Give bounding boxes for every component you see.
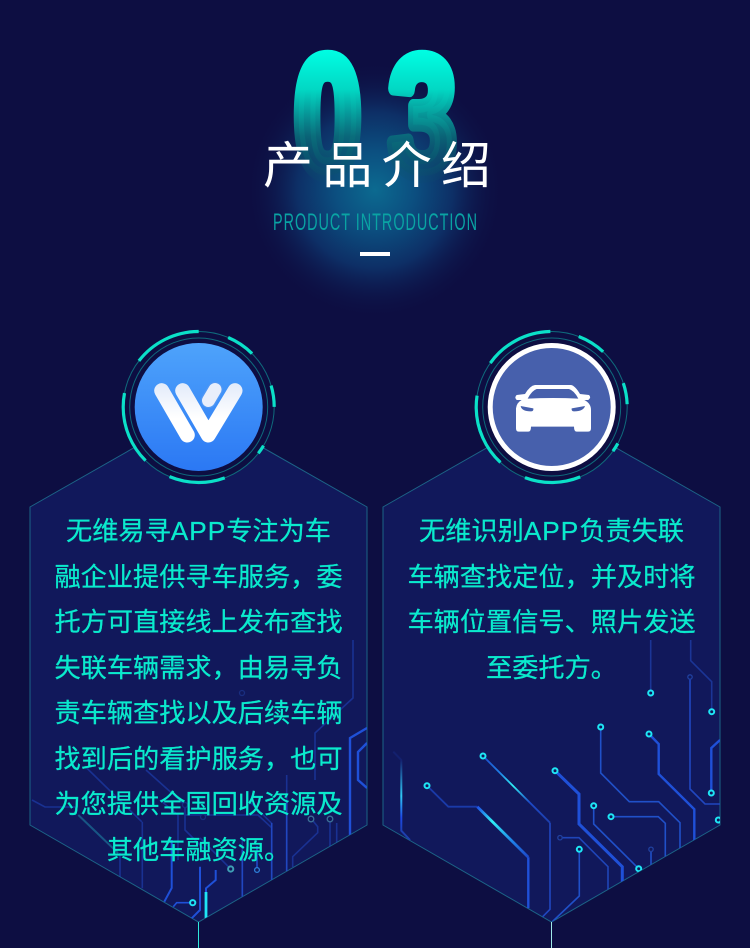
- title underline bar: [360, 252, 390, 256]
- text block: wuwei yixun description: 托方可直接线上发布查找: [54, 607, 343, 637]
- panel: wuwei recognition app: [382, 330, 720, 922]
- text block: wuwei yixun description: 找到后的看护服务，也可: [54, 744, 343, 774]
- number 03: [294, 23, 456, 211]
- text block: recognition app description: 无维识别APP负责失联: [419, 516, 684, 546]
- text block: wuwei yixun description: 为您提供全国回收资源及: [54, 789, 343, 819]
- title: 产品介绍: [263, 138, 491, 194]
- text block: recognition app description: 车辆位置信号、照片发送: [407, 607, 696, 637]
- connector line: right panel: [551, 922, 552, 948]
- icon: car logo: [475, 330, 629, 484]
- panel: wuwei yixun app: [30, 330, 368, 922]
- text block: wuwei yixun description: 失联车辆需求，由易寻负: [54, 652, 343, 682]
- hexagon shape: [383, 411, 720, 922]
- hexagon shape: [30, 411, 367, 922]
- text block: recognition app description: 至委托方。: [486, 652, 617, 682]
- text block: wuwei yixun description: 责车辆查找以及后续车辆: [54, 698, 343, 728]
- text block: recognition app description: [407, 516, 696, 682]
- text block: wuwei yixun description: 其他车融资源。: [107, 834, 290, 864]
- number 03: 0: [294, 23, 361, 211]
- subtitle: PRODUCT INTRODUCTION: [273, 209, 477, 236]
- header: section number and title: [263, 23, 491, 256]
- number 03: 3: [389, 23, 456, 211]
- text block: wuwei yixun description: [54, 516, 343, 864]
- circuit pattern: [393, 640, 721, 922]
- icon: wuwei app logo: [123, 332, 274, 482]
- text block: wuwei yixun description: 无维易寻APP专注为车: [66, 516, 331, 546]
- circuit pattern: [32, 640, 367, 918]
- connector line: left panel: [198, 922, 199, 948]
- text block: wuwei yixun description: 融企业提供寻车服务，委: [54, 562, 343, 592]
- text block: recognition app description: 车辆查找定位，并及时将: [407, 562, 696, 592]
